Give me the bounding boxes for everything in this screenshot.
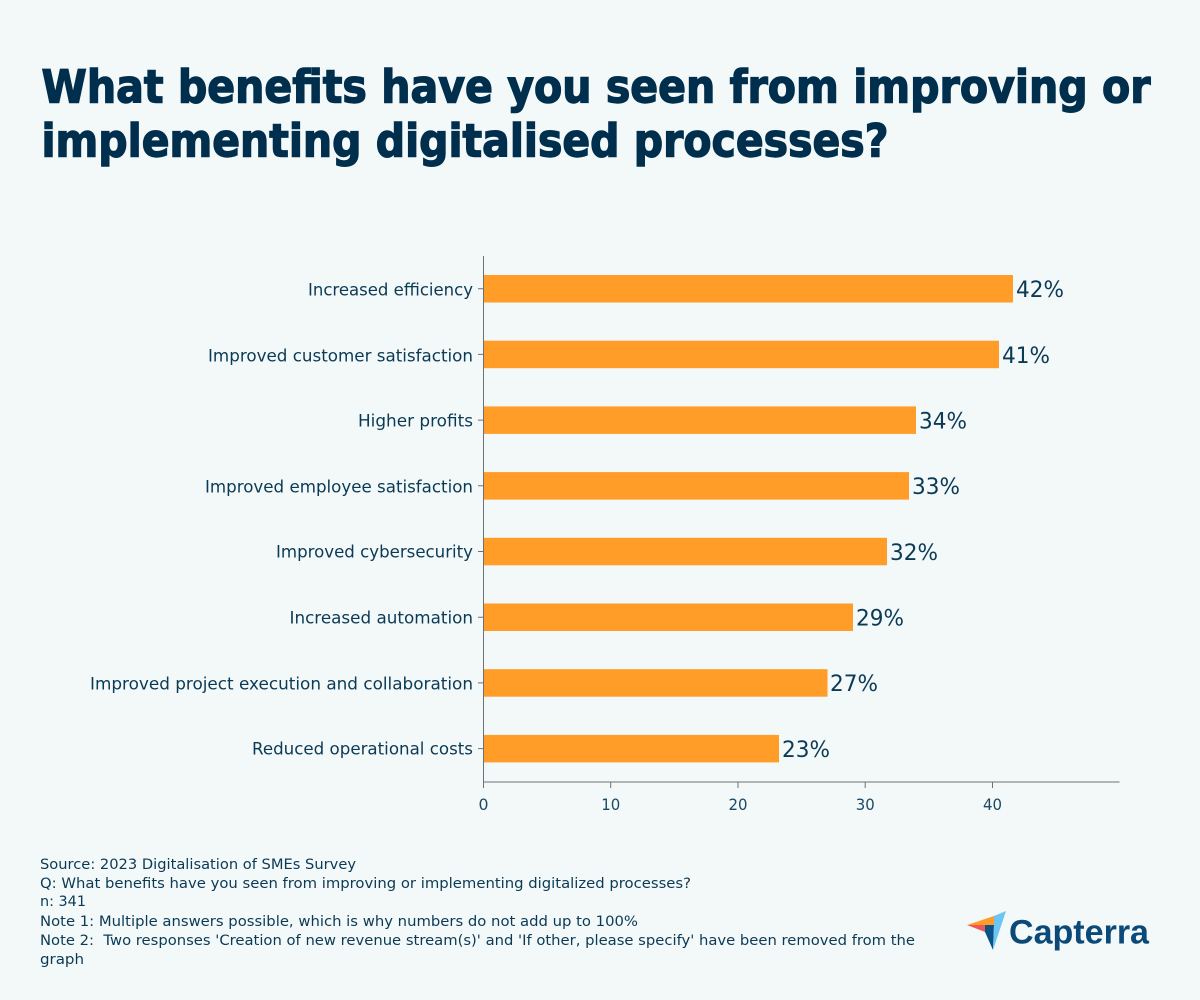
bar: Improved project execution and collaboration 27% — [90, 669, 878, 697]
bar: Improved project execution and collaboration 27%: 27% — [830, 672, 878, 697]
bar: Higher profits 34% — [358, 406, 967, 434]
source notes: Note 1: Multiple answers possible, which is why numbers do not add up to 100% — [40, 914, 638, 930]
x-axis tick labels: 30 — [856, 795, 875, 814]
logo: Capterra: Capterra — [1009, 914, 1150, 952]
bar: Improved employee satisfaction 33% — [205, 472, 960, 500]
source notes: Source: 2023 Digitalisation of SMEs Survey — [40, 857, 356, 873]
title — [42, 60, 1151, 168]
bar: Improved employee satisfaction 33%: Improved employee satisfaction — [205, 476, 473, 496]
bar: Higher profits 34%: Higher profits — [358, 410, 473, 430]
bar: Increased efficiency 42%: Increased efficiency — [308, 280, 473, 300]
bar: Improved cybersecurity 32%: Improved cybersecurity — [276, 542, 473, 562]
x-axis tick labels: 40 — [983, 795, 1002, 814]
axes — [478, 256, 1120, 788]
title: implementing digitalised processes? — [42, 114, 888, 168]
bar: Reduced operational costs 23%: 23% — [782, 738, 830, 763]
bar: Reduced operational costs 23% — [252, 735, 830, 763]
x-axis tick labels — [478, 795, 1002, 814]
source notes: Q: What benefits have you seen from improving or implementing digitalized processes? — [40, 876, 691, 892]
bar: Reduced operational costs 23%: Reduced operational costs — [252, 738, 473, 758]
source notes — [40, 857, 915, 968]
bar: Increased efficiency 42%: 42% — [1016, 278, 1064, 303]
bar: Increased automation 29%: 29% — [856, 606, 904, 632]
icon: Capterra arrow — [967, 911, 1006, 950]
bar: Improved cybersecurity 32% — [276, 538, 938, 566]
bar: Improved employee satisfaction 33%: 33% — [912, 475, 960, 500]
source notes: Note 2: Two responses 'Creation of new revenue stream(s)' and 'If other, please specify' have been removed from the — [40, 933, 915, 949]
bar: Increased efficiency 42% — [308, 275, 1064, 303]
bar: Improved customer satisfaction 41% — [208, 341, 1050, 369]
bar: Increased automation 29%: Increased automation — [290, 608, 473, 628]
bar: Improved project execution and collaboration 27%: Improved project execution and collaboration — [90, 674, 473, 694]
bar: Improved customer satisfaction 41%: Improved customer satisfaction — [208, 346, 473, 366]
bar: Higher profits 34%: 34% — [919, 410, 967, 434]
bar chart — [90, 256, 1120, 814]
bar: Increased automation 29% — [290, 604, 904, 632]
x-axis tick labels: 10 — [601, 795, 620, 814]
bar: Improved cybersecurity 32%: 32% — [890, 541, 938, 566]
x-axis tick labels: 0 — [478, 795, 488, 814]
bar: Improved customer satisfaction 41%: 41% — [1002, 344, 1050, 369]
source notes: graph — [40, 952, 84, 968]
source notes: n: 341 — [40, 894, 86, 910]
x-axis tick labels: 20 — [728, 795, 748, 814]
